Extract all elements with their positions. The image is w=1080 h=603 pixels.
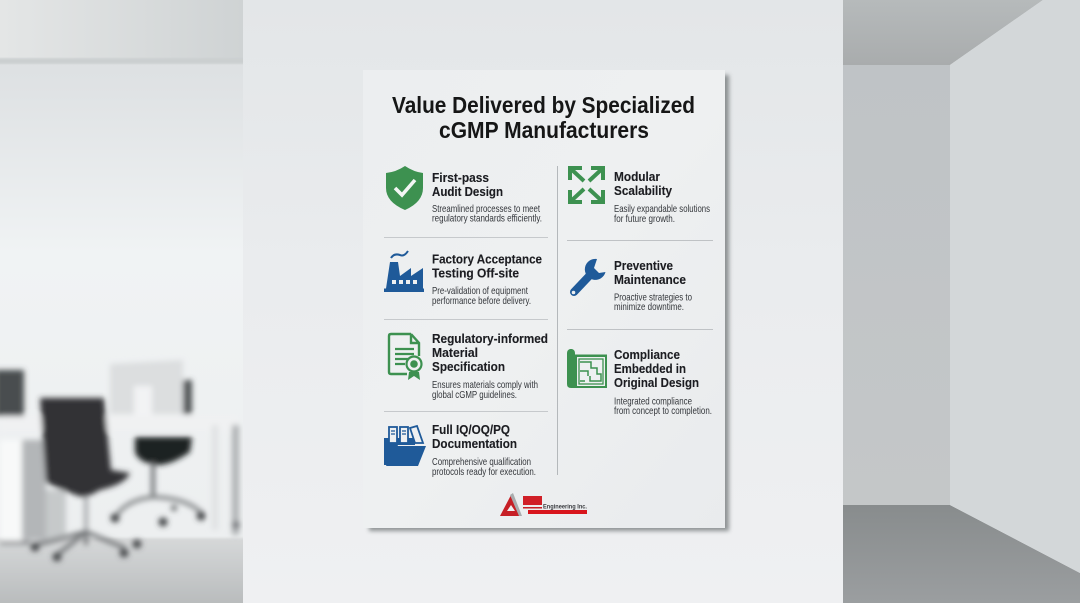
heading (432, 252, 542, 280)
description (614, 204, 710, 225)
item: First-pass Audit Design (386, 166, 542, 224)
title (392, 92, 695, 143)
heading: Original Design (614, 375, 699, 390)
heading (432, 331, 548, 374)
heading (432, 170, 503, 199)
description (614, 396, 712, 417)
icon: blueprint (567, 349, 607, 388)
heading: Compliance (614, 347, 680, 362)
description (432, 204, 542, 224)
description: protocols ready for execution. (432, 467, 536, 478)
description: Easily expandable solutions (614, 204, 710, 215)
poster panel (363, 70, 725, 528)
heading: Audit Design (432, 184, 503, 199)
heading: Modular (614, 169, 660, 184)
heading: Testing Off-site (432, 266, 519, 280)
description (432, 286, 531, 307)
description (432, 380, 538, 401)
heading: First-pass (432, 170, 489, 185)
heading (614, 258, 686, 287)
item: Regulatory-informed Material Specification (389, 331, 548, 401)
description: Integrated compliance (614, 396, 692, 408)
icon: expand arrows (570, 168, 603, 202)
item: Compliance Embedded in Original Design (567, 347, 712, 417)
description: Pre-validation of equipment (432, 286, 528, 297)
heading: Full IQ/OQ/PQ (432, 422, 510, 437)
description: Comprehensive qualification (432, 457, 531, 468)
description: minimize downtime. (614, 302, 684, 313)
description: performance before delivery. (432, 296, 531, 307)
heading: Regulatory-informed (432, 331, 548, 346)
description (614, 292, 692, 313)
item: Full IQ/OQ/PQ Documentation (384, 422, 536, 478)
heading: Material (432, 345, 478, 360)
description: Ensures materials comply with (432, 380, 538, 391)
item: Factory Acceptance Testing (384, 251, 542, 307)
icon: certificate document (389, 334, 422, 380)
item: Preventive Maintenance (572, 258, 692, 313)
logo (500, 493, 587, 516)
title: cGMP Manufacturers (439, 117, 649, 143)
description: for future growth. (614, 214, 675, 225)
description (432, 457, 536, 478)
heading: Embedded in (614, 361, 686, 376)
heading (614, 169, 673, 198)
background: central wall (243, 0, 843, 603)
item: Modular Scalability (570, 168, 710, 225)
heading: Preventive (614, 258, 673, 273)
title: Value Delivered by Specialized (392, 92, 695, 118)
icon: factory (384, 251, 424, 292)
description: from concept to completion. (614, 406, 712, 417)
icon: folder with binders (384, 426, 426, 466)
description: Proactive strategies to (614, 292, 692, 304)
heading: Maintenance (614, 272, 686, 287)
column divider (557, 166, 558, 475)
icon: shield check (386, 166, 423, 210)
logo: Engineering Inc. (543, 504, 587, 510)
heading: Factory Acceptance (432, 252, 542, 266)
icon: wrench (572, 259, 606, 294)
heading: Documentation (432, 436, 517, 451)
heading: Specification (432, 359, 505, 374)
heading (614, 347, 699, 390)
poster shadow (369, 75, 729, 531)
heading (432, 422, 517, 451)
description: Streamlined processes to meet (432, 204, 540, 215)
description: global cGMP guidelines. (432, 390, 517, 401)
background: blurred office left (0, 0, 248, 603)
heading: Scalability (614, 183, 673, 198)
background: blurred room right (843, 0, 1080, 603)
description: regulatory standards efficiently. (432, 214, 542, 224)
